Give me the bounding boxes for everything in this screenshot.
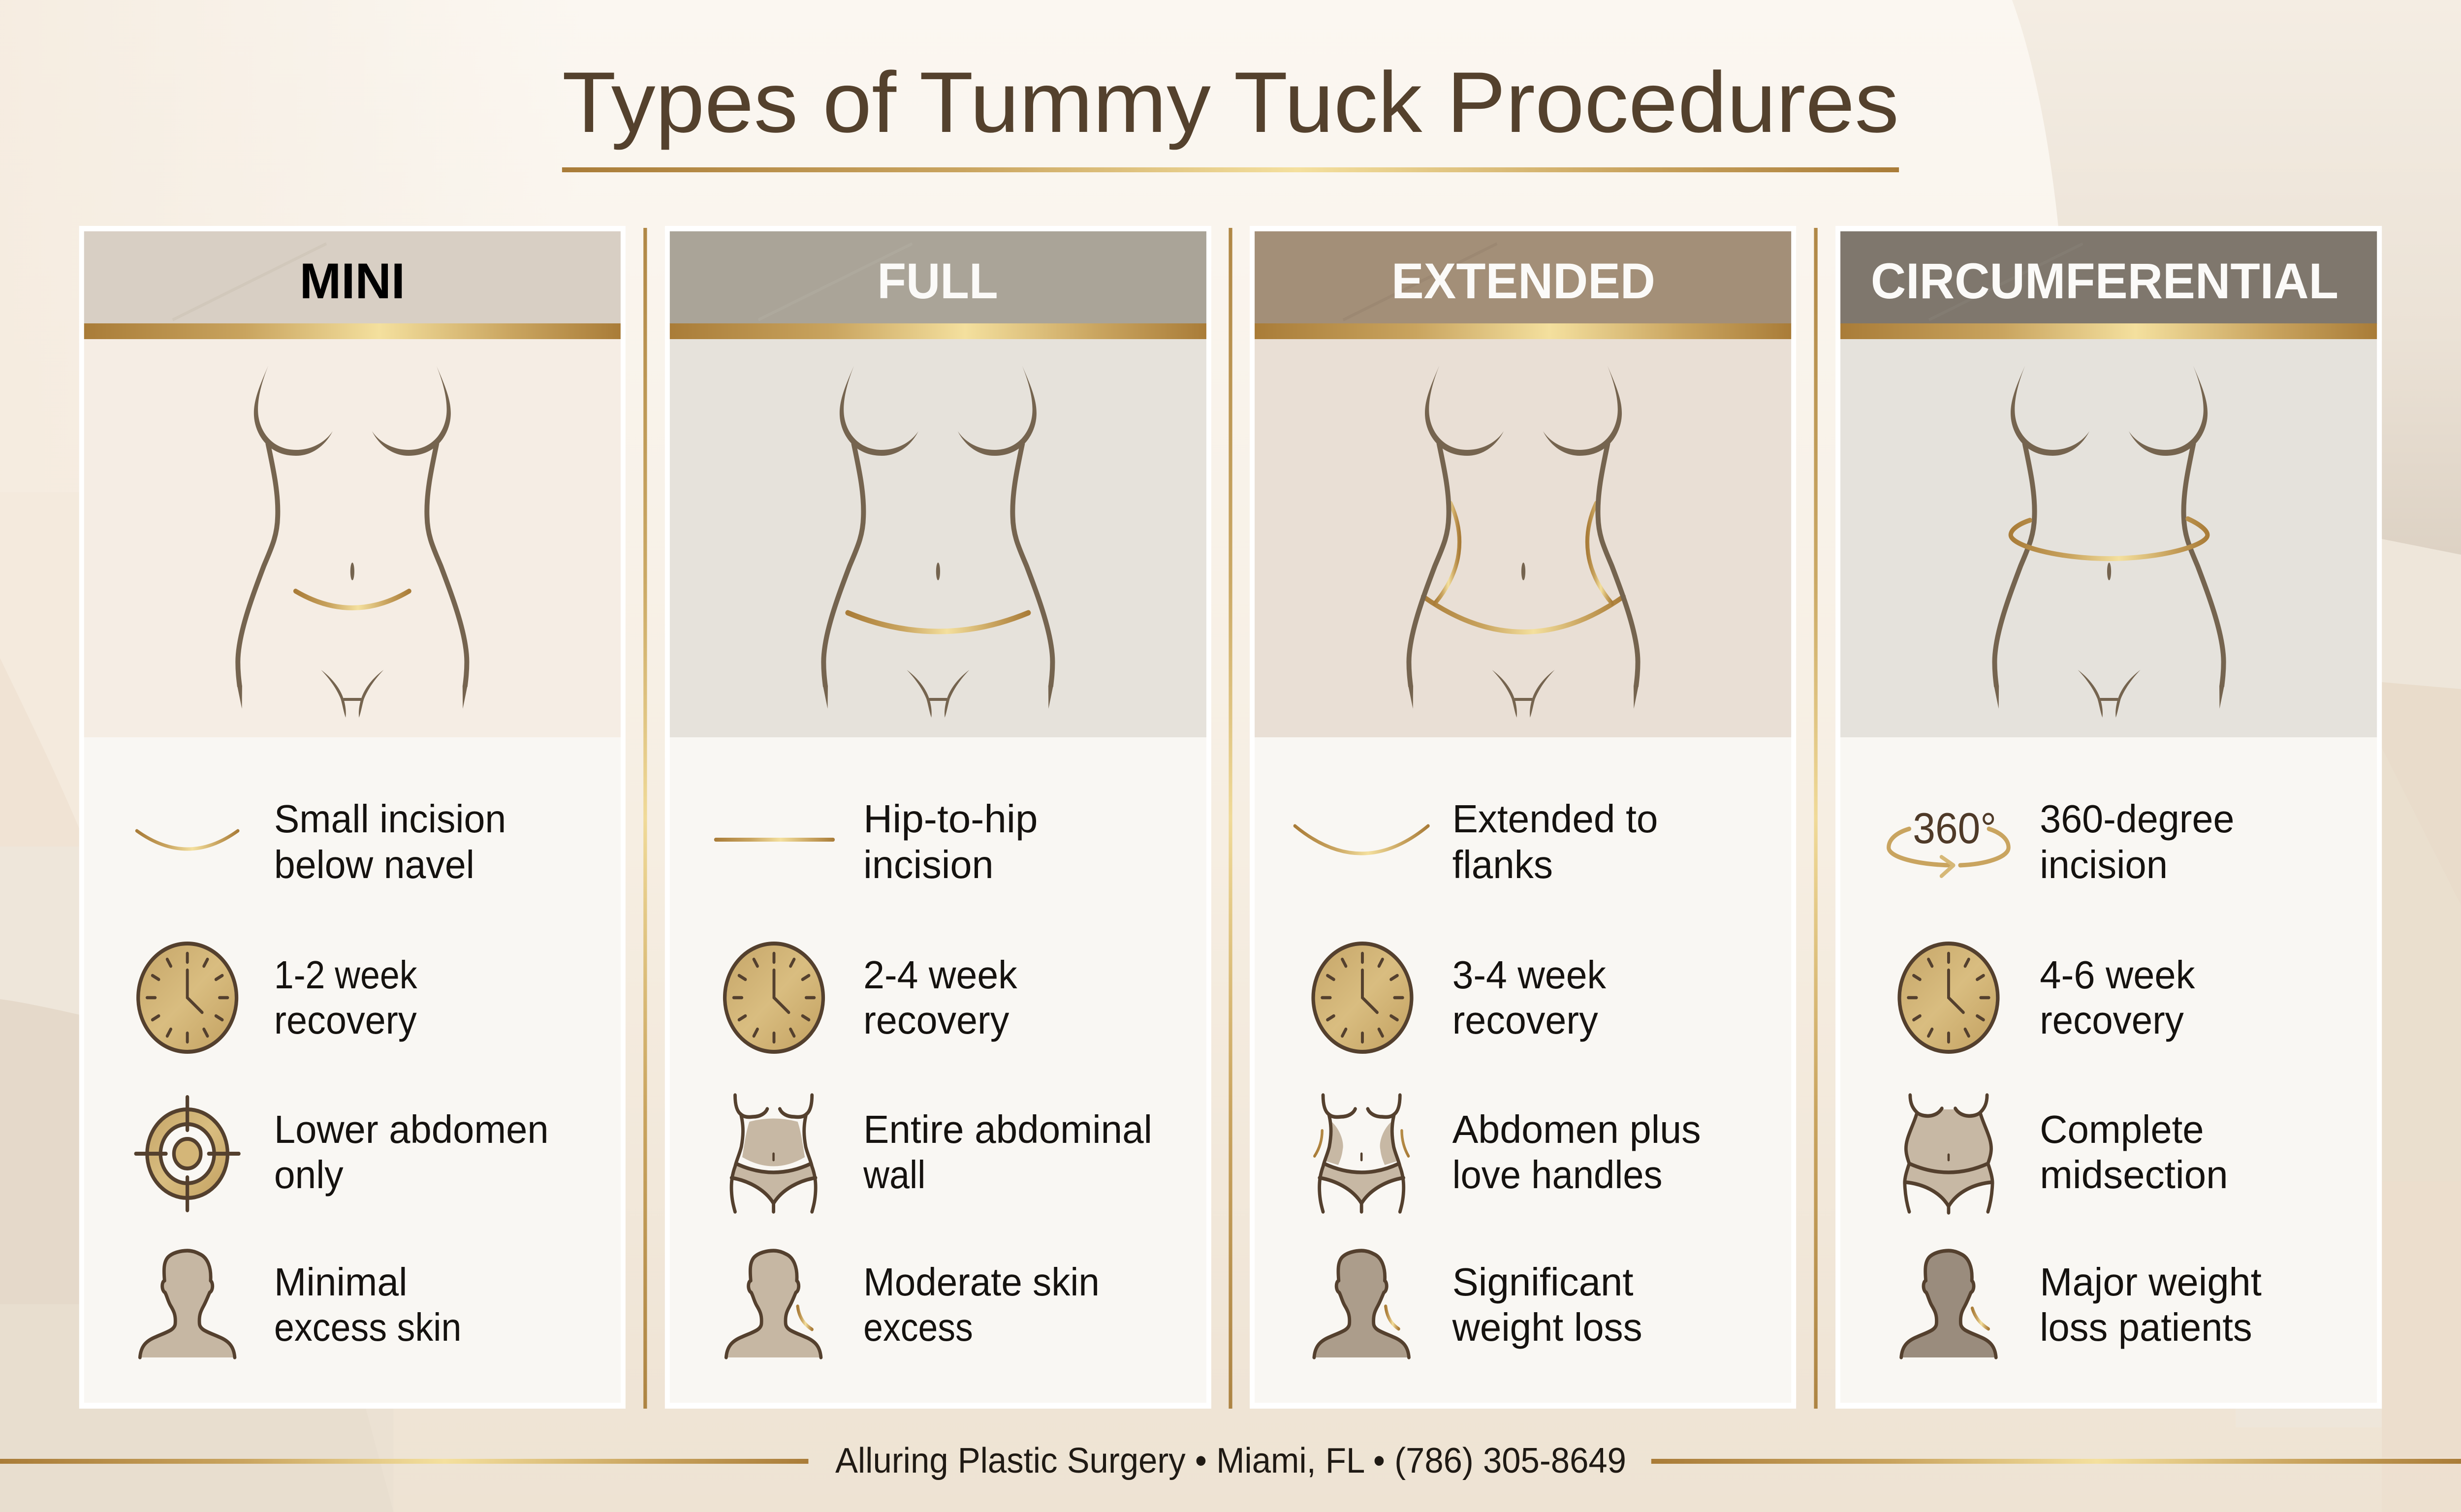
row: recovery [725,944,1017,1052]
gold bar [1255,323,1791,339]
title: Types of Tummy Tuck Procedures [562,55,1899,151]
row: recovery: 3-4 week [1452,953,1607,997]
header: full [670,231,1206,324]
header: full: FULL [877,253,998,309]
row: candidate: loss patients [2040,1306,2252,1350]
row: recovery [138,944,417,1052]
icon: clock [1899,944,1998,1052]
header: extended: EXTENDED [1391,253,1655,309]
row: incision: Extended to [1452,797,1658,841]
row: area: Entire abdominal [863,1108,1152,1152]
gold bar [84,323,621,339]
row: area [1905,1095,2228,1213]
row: candidate [726,1251,1100,1357]
header: circumferential: CIRCUMFERENTIAL [1871,253,2338,309]
divider 3 [1814,228,1818,1409]
row: incision: below navel [274,843,474,887]
row: recovery: 2-4 week [863,953,1017,997]
icon: person [1901,1251,1996,1357]
row: incision [137,797,506,887]
header: extended [1255,231,1791,324]
panel: mini [79,226,626,1409]
header: circumferential [1840,231,2377,324]
incision: mini [295,591,409,608]
row: recovery: recovery [274,999,417,1042]
row: recovery: recovery [863,999,1010,1042]
icon: abdomen plus love handles [1315,1095,1409,1212]
row: candidate: excess skin [274,1306,462,1350]
row: area: only [274,1153,344,1197]
row: recovery: 1-2 week [274,953,417,997]
row: incision: Small incision [274,797,506,841]
row: incision: Hip-to-hip [863,797,1038,841]
icon: 360 degree [1889,804,2009,876]
row: recovery [1313,944,1607,1052]
footer [0,1441,2461,1480]
icon: clock [138,944,237,1052]
row: candidate [140,1251,462,1357]
row: area: midsection [2040,1153,2228,1197]
row: candidate: Minimal [274,1260,408,1304]
header: mini: MINI [300,253,405,309]
row: recovery: recovery [2040,999,2184,1042]
header: mini [84,231,621,324]
row: candidate: Significant [1452,1260,1633,1304]
row: incision: 360-degree [2040,797,2234,841]
incision: extended [1423,503,1624,632]
body diagram: mini [84,339,621,737]
row: candidate [1314,1251,1642,1357]
panel: full [665,226,1211,1409]
row: recovery: 4-6 week [2040,953,2195,997]
gold bar [670,323,1206,339]
icon: person [726,1251,821,1357]
row: area [1315,1095,1701,1212]
row: recovery: recovery [1452,999,1599,1042]
row: area [731,1095,1152,1212]
row: candidate: excess [863,1306,973,1350]
icon: entire abdomen [731,1095,816,1212]
row: incision: incision [863,843,994,887]
body diagram: extended [1255,339,1791,737]
icon: hip-to-hip incision [714,838,835,842]
icon: 360 degree: 360° [1913,804,1996,852]
row: candidate: Moderate skin [863,1260,1100,1304]
title underline [562,167,1899,172]
incision: circumferential ring [2011,519,2208,559]
row: recovery [1899,944,2195,1052]
row: area [136,1097,549,1210]
icon: complete midsection [1905,1095,1992,1213]
incision: full [848,613,1028,631]
divider 1 [643,228,647,1409]
row: area: Complete [2040,1108,2204,1152]
icon: extended incision [1295,826,1428,853]
row: incision [714,797,1038,887]
panel: circumferential [1835,226,2382,1409]
body diagram: circumferential [1840,339,2377,737]
row: candidate: Major weight [2040,1260,2262,1304]
icon: small incision [137,831,238,849]
row: candidate [1901,1251,2262,1357]
row: candidate: weight loss [1452,1306,1642,1350]
panel: extended [1250,226,1796,1409]
row: incision: incision [2040,843,2168,887]
icon: person [140,1251,235,1357]
icon: clock [725,944,823,1052]
row: incision: flanks [1452,843,1553,887]
row: area: wall [863,1153,925,1197]
body diagram: full [670,339,1206,737]
divider 2 [1229,228,1232,1409]
icon: person [1314,1251,1409,1357]
icon: clock [1313,944,1412,1052]
icon: target [136,1097,239,1210]
row: incision [1889,797,2234,887]
gold bar [1840,323,2377,339]
footer: Alluring Plastic Surgery • Miami, FL • (786) 305-8649 [835,1441,1626,1480]
row: area: Abdomen plus [1452,1108,1701,1152]
row: incision [1295,797,1658,887]
row: area: love handles [1452,1153,1663,1197]
row: area: Lower abdomen [274,1108,549,1152]
